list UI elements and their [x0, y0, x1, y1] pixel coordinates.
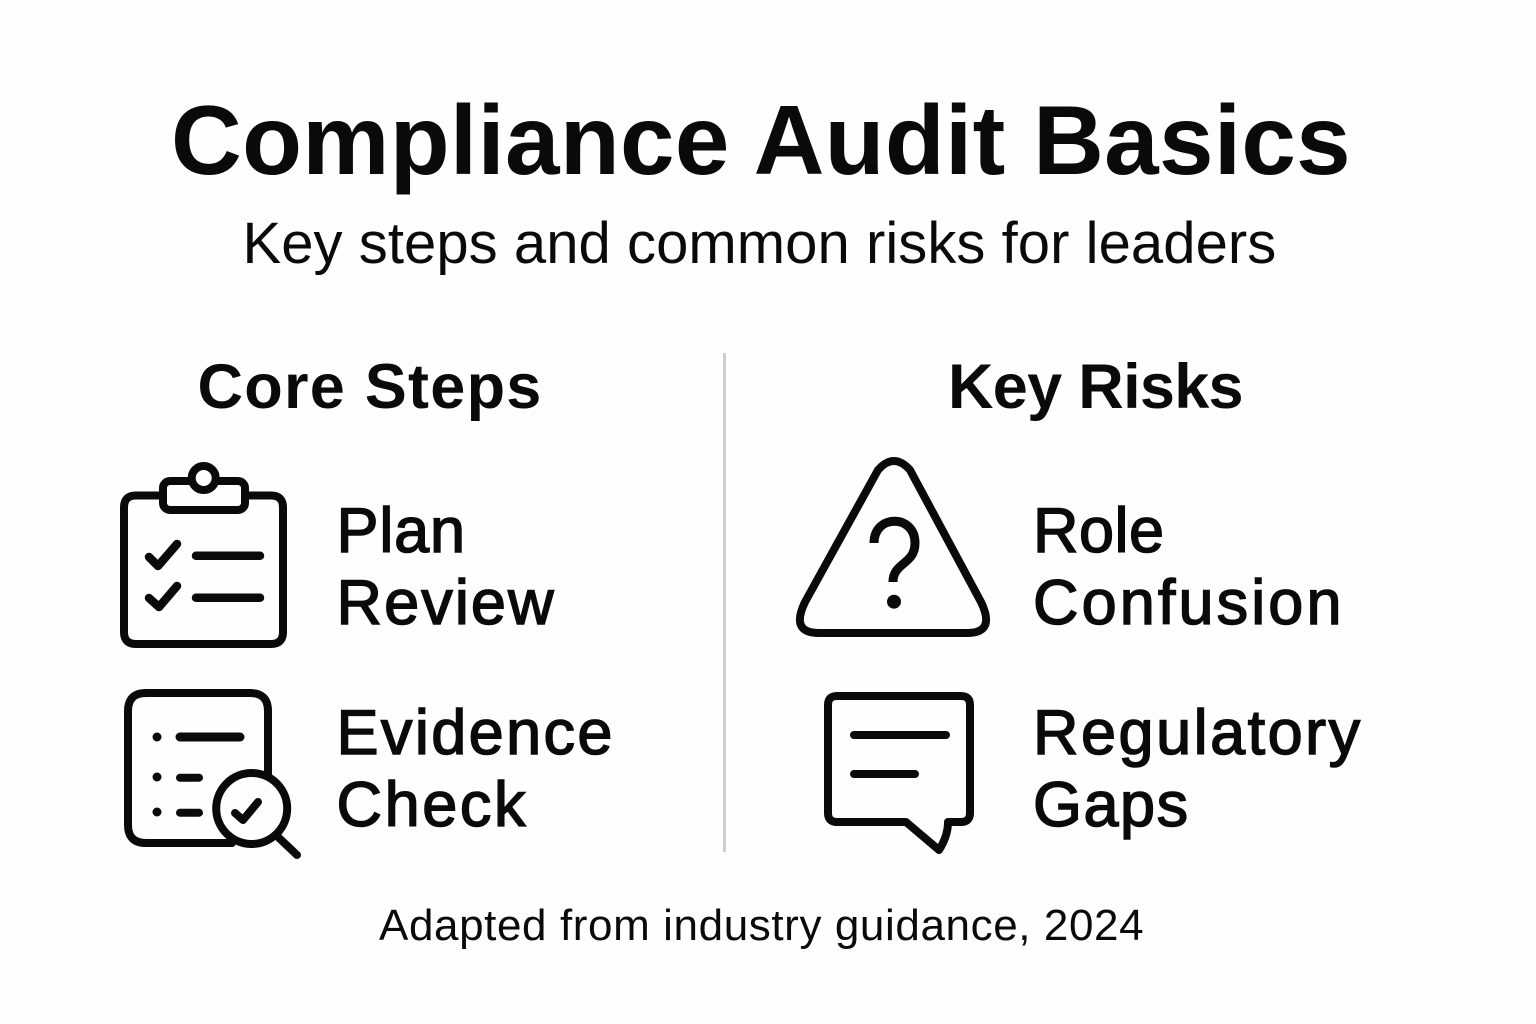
label: plan review: [336, 496, 556, 638]
label: role confusion: Role: [1033, 496, 1165, 566]
icon: evidence list with magnifier: [124, 689, 301, 859]
column divider: [723, 353, 726, 852]
icon: clipboard checklist: [120, 462, 287, 648]
label: plan review: Plan: [336, 496, 466, 566]
label: role confusion: [1033, 496, 1345, 638]
label: evidence check: Check: [336, 770, 528, 840]
label: evidence check: [336, 698, 615, 840]
label: regulatory gaps: [1033, 698, 1363, 840]
heading: core steps: Core Steps: [198, 352, 543, 422]
icon: warning triangle with question mark: [796, 457, 990, 637]
label: regulatory gaps: Gaps: [1033, 770, 1190, 840]
label: regulatory gaps: Regulatory: [1033, 698, 1363, 768]
label: plan review: Review: [336, 568, 556, 638]
label: role confusion: Confusion: [1033, 568, 1345, 638]
source note: Adapted from industry guidance, 2024: [379, 901, 1144, 950]
label: evidence check: Evidence: [336, 698, 615, 768]
title: Compliance Audit Basics: [171, 85, 1351, 195]
heading: key risks: Key Risks: [948, 352, 1243, 422]
icon: speech bubble: [824, 692, 974, 854]
subtitle: Key steps and common risks for leaders: [242, 211, 1276, 276]
